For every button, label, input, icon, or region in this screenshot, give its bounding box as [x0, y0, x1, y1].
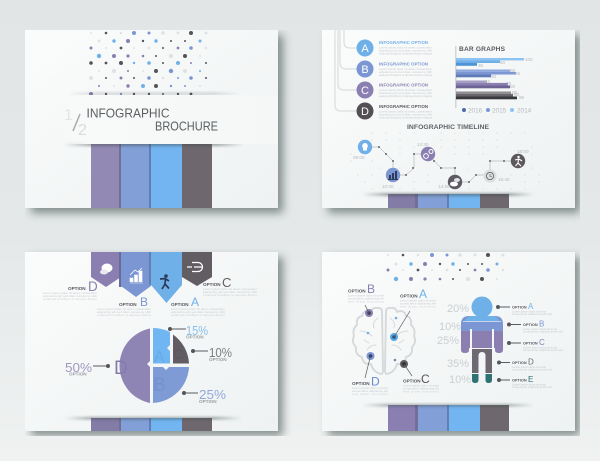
bar graph: 85 — [515, 71, 521, 76]
dot pattern — [386, 253, 504, 281]
colour stripes — [91, 418, 212, 431]
brain — [353, 308, 415, 374]
option C: C — [361, 85, 369, 97]
legend: 2016 — [468, 108, 483, 114]
option D text: OPTION — [68, 286, 86, 291]
brain option D: Lorem ipsum dolor sit amet — [352, 386, 388, 390]
brain option D: consectetur adipiscing elit — [352, 389, 388, 393]
bar graph heading: BAR GRAPHS — [459, 46, 506, 53]
panel: brain and body — [322, 252, 580, 436]
timeline path — [365, 146, 518, 183]
body option B — [507, 320, 563, 334]
ribbon D — [91, 252, 121, 287]
head — [472, 296, 492, 318]
label 10%: 10% — [209, 345, 232, 360]
option B text: adipiscing elit sed diam nonummy nibh — [97, 310, 151, 314]
panel: pie chart — [25, 252, 283, 436]
slice C 10% — [173, 334, 189, 364]
option A text: euismod tincidunt ut laoreet dolore — [171, 313, 225, 317]
option B: adipiscing elit sed diam nonummy nibh — [379, 70, 432, 74]
brain option B: OPTION — [348, 288, 366, 294]
bar graph: 100 — [525, 57, 533, 62]
feet — [472, 374, 492, 383]
title band: BROCHURE — [155, 120, 218, 134]
right hemisphere — [385, 308, 415, 374]
option D text: Lorem ipsum dolor sit amet, consectetur — [43, 291, 97, 295]
option A text — [171, 295, 225, 317]
option D: INFOGRAPHIC OPTION — [379, 104, 428, 109]
slice A 15% — [153, 328, 170, 364]
brain option A: OPTION — [400, 294, 418, 298]
timeline heading: INFOGRAPHIC TIMELINE — [407, 124, 489, 131]
body option D — [497, 358, 552, 372]
bar graph: 85 — [512, 90, 518, 95]
option D: D — [361, 106, 369, 118]
body option D: Lorem ipsum dolor sit amet — [512, 365, 546, 369]
option C text: euismod tincidunt ut laoreet dolore — [203, 293, 257, 297]
slice D 50% — [120, 328, 150, 403]
option A text: A — [191, 295, 199, 309]
body option B: B — [539, 320, 544, 328]
body option A: A — [528, 302, 534, 311]
node 18:00 — [511, 149, 529, 168]
pie chart: B — [153, 375, 166, 396]
body option A — [496, 302, 552, 316]
body option E: Lorem ipsum dolor sit amet — [512, 382, 546, 386]
option B: INFOGRAPHIC OPTION — [379, 62, 428, 66]
option C text: Lorem ipsum dolor sit amet, consectetur — [203, 287, 257, 291]
node 12:30 — [417, 142, 435, 161]
pie chart — [114, 328, 189, 403]
body option B: consectetur adipiscing elit sed — [523, 330, 563, 334]
option A text: adipiscing elit sed diam nonummy nibh — [171, 310, 225, 314]
bar graph: 75 — [506, 81, 512, 86]
panel: bar graphs and timeline — [322, 30, 580, 213]
colour stripes — [91, 144, 212, 208]
body option C — [507, 338, 563, 352]
body option C: C — [539, 338, 545, 347]
option C text — [203, 275, 257, 297]
legs — [472, 349, 492, 373]
body option C: OPTION — [523, 342, 538, 346]
body option A: consectetur adipiscing elit sed — [512, 312, 552, 316]
option A text: OPTION — [171, 302, 189, 307]
option C: adipiscing elit sed diam nonummy nibh — [379, 91, 432, 95]
brain markers — [365, 305, 412, 378]
left hemisphere — [353, 308, 383, 374]
dot pattern — [89, 31, 208, 96]
option D text: euismod tincidunt ut laoreet dolore — [43, 297, 97, 301]
label 50%: 50% — [65, 360, 92, 375]
label 25%: 25% — [199, 387, 226, 402]
brain option C: Lorem ipsum dolor sit amet — [403, 384, 439, 388]
body option D: consectetur adipiscing elit sed — [512, 368, 552, 372]
ribbon B — [119, 252, 151, 297]
body option C: consectetur adipiscing elit sed — [523, 348, 563, 352]
bar graph: 60 — [500, 60, 506, 65]
option D text — [43, 279, 98, 301]
brain option B: Lorem ipsum dolor sit amet — [348, 294, 384, 298]
brain option A: sed diam nonummy — [400, 304, 437, 308]
brain option B — [348, 282, 385, 304]
option B text — [97, 295, 151, 317]
legend: 2015 — [492, 108, 507, 114]
legend — [462, 108, 532, 114]
bar graph: 50 — [491, 74, 497, 79]
option B: Lorem ipsum dolor sit amet, consectetur — [379, 67, 432, 71]
brain option C: C — [421, 372, 430, 386]
timeline — [350, 132, 540, 190]
fraction 1/2 — [64, 107, 87, 139]
colour stripes — [388, 405, 509, 431]
option list connectors — [335, 30, 357, 111]
option A: A — [361, 43, 369, 55]
pie chart: C — [173, 346, 183, 362]
body option E — [497, 375, 552, 389]
body option B: OPTION — [523, 323, 538, 327]
label 10%: OPTION — [209, 357, 227, 362]
panel: cover brochure — [25, 30, 283, 213]
body option B: Lorem ipsum dolor sit amet — [523, 327, 557, 331]
label 50%: OPTION — [69, 372, 87, 376]
option A: Lorem ipsum dolor sit amet, consectetur — [379, 46, 432, 50]
brain option D: sed diam nonummy — [352, 392, 389, 396]
option A: adipiscing elit sed diam nonummy nibh — [379, 48, 432, 52]
option D text: adipiscing elit sed diam nonummy nibh — [43, 294, 97, 298]
body option E: E — [528, 375, 533, 384]
bar graph: 80 — [510, 84, 516, 89]
node 10:00 — [382, 168, 400, 189]
brain option D: D — [371, 374, 380, 388]
percent 25%: 25% — [437, 335, 459, 347]
brain option A — [400, 287, 437, 308]
option D — [356, 102, 432, 120]
percent 20%: 20% — [447, 303, 469, 315]
option B: euismod tincidunt ut laoreet dolore magna — [379, 73, 432, 77]
fraction 1/2: 1 — [64, 107, 73, 124]
percent 10% lower: 10% — [449, 374, 471, 386]
ribbon C — [182, 252, 212, 286]
brain option B: sed diam nonummy — [348, 300, 385, 304]
option A text: Lorem ipsum dolor sit amet, consectetur — [171, 307, 225, 311]
body option D: D — [528, 358, 534, 366]
option C text: adipiscing elit sed diam nonummy nibh — [203, 290, 257, 294]
bar graph: 95 — [519, 95, 525, 100]
brain option C: sed diam nonummy — [403, 390, 440, 394]
percent 35%: 35% — [447, 358, 469, 370]
bar graph: 80 — [510, 68, 516, 73]
brain option A: consectetur adipiscing elit — [400, 302, 436, 306]
person figure — [461, 296, 503, 383]
option B text: Lorem ipsum dolor sit amet, consectetur — [97, 307, 151, 311]
brain option D — [352, 374, 389, 396]
option C text: OPTION — [203, 282, 221, 287]
label 15% — [168, 323, 208, 340]
option C — [356, 82, 432, 98]
title band — [60, 95, 278, 144]
body option C: Lorem ipsum dolor sit amet — [523, 346, 557, 350]
option B — [356, 60, 432, 78]
option A — [356, 40, 432, 56]
option B text: euismod tincidunt ut laoreet dolore — [97, 313, 151, 317]
timeline dot grid — [350, 132, 540, 190]
brain option B: consectetur adipiscing elit — [348, 296, 384, 300]
node 16:40: 16:40 — [498, 177, 510, 182]
node 12:30: 12:30 — [417, 142, 429, 147]
title text: INFOGRAPHIC — [86, 106, 170, 120]
pie chart: D — [114, 358, 128, 379]
option A: euismod tincidunt ut laoreet dolore magna — [379, 52, 432, 56]
option B text: OPTION — [119, 302, 137, 307]
brain option C — [403, 372, 440, 394]
body option E: consectetur adipiscing elit sed — [512, 385, 552, 389]
option D: Lorem ipsum dolor sit amet, consectetur — [379, 110, 432, 114]
label 15%: 15% — [186, 323, 208, 338]
option C: euismod tincidunt ut laoreet dolore magna — [379, 94, 432, 98]
brain option B: B — [367, 282, 375, 296]
slice B 25% — [153, 367, 189, 403]
body option A: OPTION — [512, 306, 527, 310]
node 14:00: 14:00 — [438, 184, 450, 189]
brain option A: A — [419, 287, 427, 301]
body option A: Lorem ipsum dolor sit amet — [512, 310, 546, 314]
option A: INFOGRAPHIC OPTION — [379, 40, 428, 45]
legend: 2014 — [517, 108, 532, 114]
brain option C: OPTION — [403, 378, 421, 384]
ribbon A — [149, 252, 182, 303]
node 09:00 — [353, 140, 372, 160]
label 50% — [65, 360, 110, 376]
option C text: C — [222, 275, 231, 290]
percent 10% upper: 10% — [439, 321, 461, 333]
label 25%: OPTION — [199, 399, 217, 404]
brain option C: consectetur adipiscing elit — [403, 386, 439, 390]
node 10:00: 10:00 — [382, 184, 394, 189]
option C: INFOGRAPHIC OPTION — [379, 82, 428, 88]
bar graph — [455, 46, 533, 114]
label 10% — [191, 345, 232, 362]
node 09:00: 09:00 — [353, 155, 365, 160]
option B text: B — [140, 295, 148, 309]
option D: adipiscing elit sed diam nonummy nibh — [379, 112, 432, 116]
node 16:40 — [483, 169, 510, 183]
brain option D: OPTION — [352, 381, 370, 386]
bar graph: 90 — [514, 92, 520, 97]
option B: B — [361, 64, 369, 76]
node 18:00: 18:00 — [517, 149, 529, 154]
option D text: D — [88, 279, 98, 294]
torso — [461, 331, 503, 348]
body option E: OPTION — [512, 378, 527, 382]
bar graph: 45 — [485, 79, 491, 84]
label 15%: OPTION — [186, 334, 204, 340]
body option D: OPTION — [512, 361, 527, 365]
pie chart: A — [154, 349, 165, 366]
node 14:00 — [438, 175, 462, 189]
label 25% — [182, 387, 226, 404]
option C: Lorem ipsum dolor sit amet, consectetur — [379, 88, 432, 92]
fraction 1/2: 2 — [78, 122, 87, 139]
option D: euismod tincidunt ut laoreet dolore magna — [379, 116, 432, 120]
colour stripes — [388, 194, 509, 208]
brain option A: Lorem ipsum dolor sit amet — [400, 298, 436, 302]
bar graph: 30 — [478, 63, 484, 68]
